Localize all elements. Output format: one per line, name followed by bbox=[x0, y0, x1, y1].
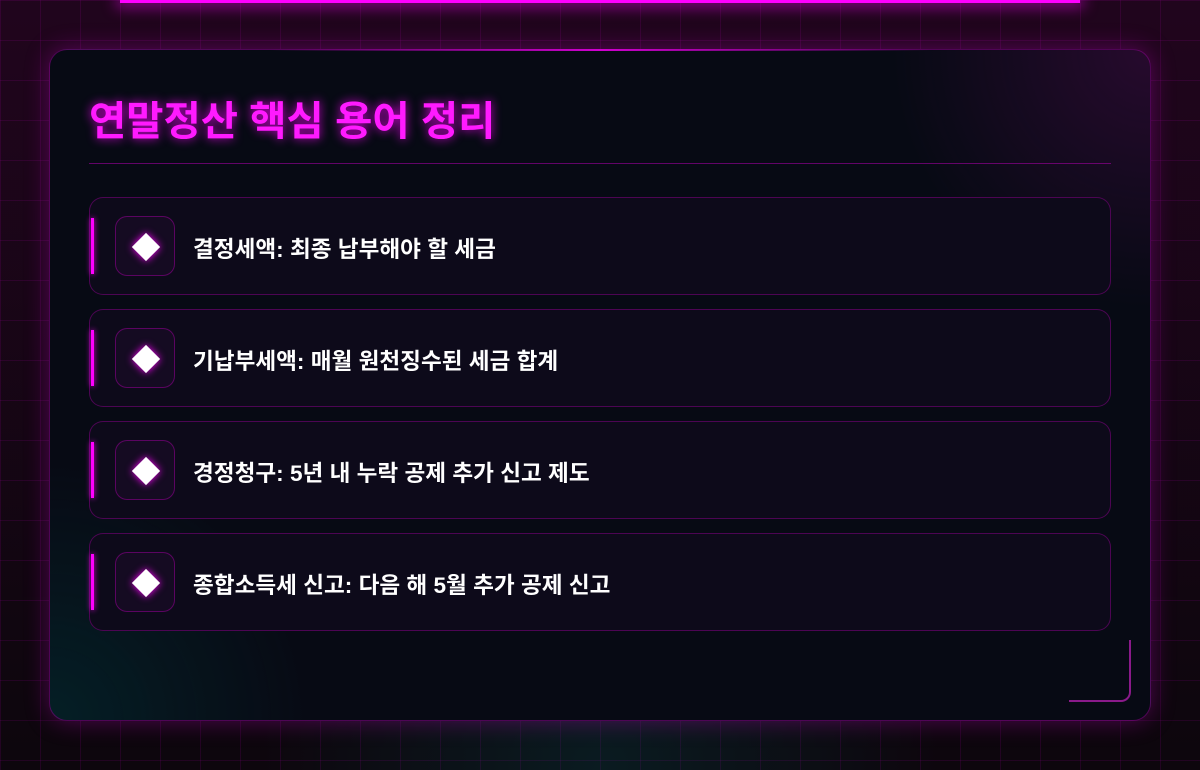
item: 경정청구: 경정청구: 5년 내 누락 공제 추가 신고 제도 bbox=[193, 461, 590, 486]
item: 기납부세액: 기납부세액: 매월 원천징수된 세금 합계 bbox=[193, 349, 558, 374]
item: 기납부세액 bbox=[89, 309, 1111, 407]
item: 결정세액: 결정세액: 최종 납부해야 할 세금 bbox=[193, 237, 496, 262]
item: 경정청구 bbox=[89, 421, 1111, 519]
title: 연말정산 핵심 용어 정리 bbox=[89, 98, 495, 144]
item: 종합소득세 신고 bbox=[89, 533, 1111, 631]
item: 결정세액 bbox=[89, 197, 1111, 295]
item: 종합소득세 신고: 종합소득세 신고: 다음 해 5월 추가 공제 신고 bbox=[193, 573, 610, 598]
